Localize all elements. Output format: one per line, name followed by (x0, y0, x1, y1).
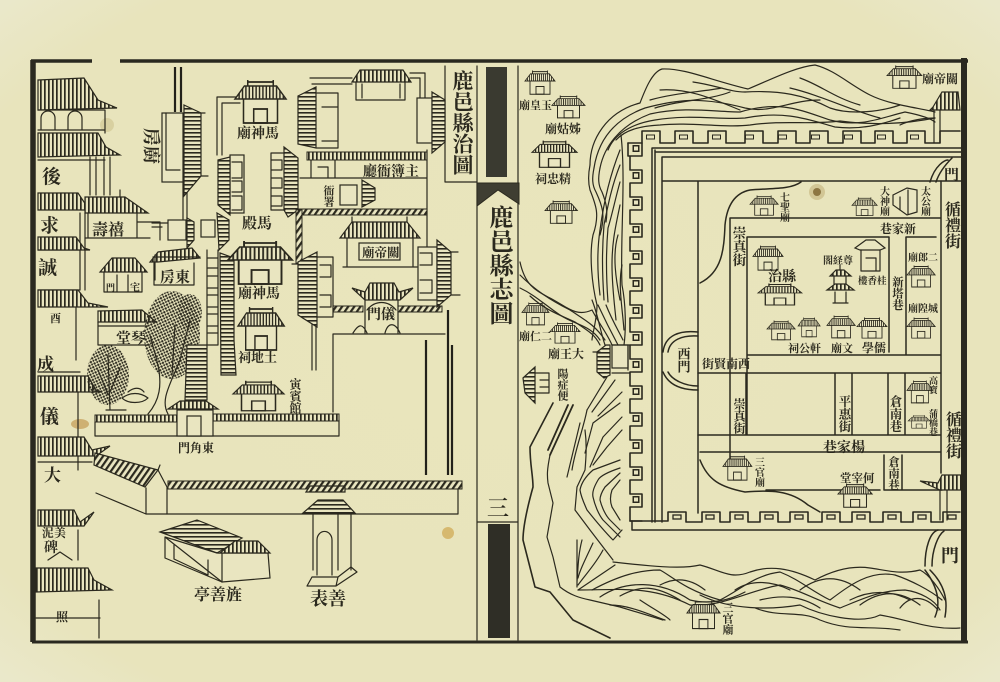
building row: 學儒 (861, 340, 886, 355)
mound (122, 388, 148, 402)
inner city walls and streets (632, 148, 962, 617)
building: east wing (150, 248, 200, 286)
county office (758, 268, 802, 305)
temple: gao (907, 375, 938, 403)
tower roof 7 (38, 437, 110, 456)
south wall with east corner gate: 門角東 (178, 440, 214, 455)
side building: lower west (292, 252, 333, 327)
temple: gu (545, 96, 585, 136)
temple: pu qiao (908, 408, 938, 436)
temple: gu: 廟姑姊 (545, 121, 581, 136)
temple: gao: 高寶 (928, 375, 938, 395)
tree right (144, 291, 202, 414)
memorial tower (303, 486, 357, 609)
temple: da shen (852, 185, 890, 217)
ceremonial gate: 門儀 (367, 306, 395, 323)
pavilion (160, 520, 270, 604)
dark ink block bottom (488, 524, 510, 638)
label: cang nan lane: 倉南巷 (888, 394, 902, 432)
building: earth god shrine: 祠地土 (238, 350, 277, 365)
side temple: 陽症便 (556, 367, 568, 402)
temple: yu huang (519, 71, 555, 112)
temple: san guan south (687, 601, 734, 636)
temple: city god: 廟隍城 (908, 302, 938, 315)
temple: er lang (907, 251, 938, 287)
temple: unnamed (545, 201, 577, 223)
building: residence gate: 宅 (130, 282, 140, 294)
top temple (310, 70, 425, 100)
folio number: 三 (487, 496, 509, 521)
temple: guandi NE: 廟帝關 (922, 71, 958, 86)
temple: pu qiao: 蒲橋巷 (928, 408, 938, 436)
tower roof 6 (38, 376, 102, 392)
south wall with east corner gate (95, 401, 339, 455)
guandi temple: 廟帝關 (362, 245, 400, 260)
river west band (588, 135, 625, 345)
temple: yu huang: 廟皇玉 (519, 98, 552, 112)
temple: san guan: 三官廟 (752, 457, 764, 488)
fish-tail ornament (477, 183, 519, 206)
temple: tai gong (893, 185, 930, 217)
building: residence gate: 門 (106, 283, 115, 293)
left palace towers: 照 (56, 610, 69, 624)
label: yang jia lane: 巷家楊 (823, 439, 865, 456)
tower roof 8 (38, 510, 94, 526)
city wall west crenels (628, 143, 642, 521)
tower: gui xiang: 樓香桂 (858, 275, 887, 287)
left palace towers: 求 (40, 215, 59, 237)
left palace towers: 大 (44, 466, 61, 485)
left palace towers: 酉 (50, 311, 61, 325)
building: qin hall (98, 310, 156, 347)
left palace towers: 成 (37, 355, 54, 374)
tree left (87, 345, 129, 410)
title left: 鹿邑縣治圖 (450, 69, 474, 175)
building: horse god temple upper: 廟神馬 (237, 125, 279, 142)
building: east wing: 房東 (160, 268, 190, 286)
building row: 祠公軒 (788, 341, 821, 355)
side building: hall west (218, 155, 244, 215)
river northwest feeder (520, 262, 612, 345)
inner city gates and towers (676, 66, 962, 636)
NE gate tower (930, 92, 960, 143)
side building: kitchen (162, 105, 208, 196)
label: chong zhen street south: 崇真街 (731, 397, 746, 435)
side building: small pair (168, 213, 229, 250)
left palace towers: 儀 (40, 406, 59, 428)
pagoda (827, 265, 854, 303)
left palace towers: 誠 (38, 257, 57, 279)
temple: er lang: 廟郎二 (908, 251, 938, 264)
building row: 廟文 (831, 341, 853, 355)
temple: he zai hall (838, 471, 875, 507)
river north band (590, 65, 935, 168)
label: xi nan xian street: 街賢南西 (702, 356, 750, 371)
left palace towers (36, 78, 120, 638)
left palace towers: 泥美 (42, 525, 66, 540)
label: west gate: 西門 (676, 346, 690, 374)
building: shou xi: 壽禧 (92, 220, 124, 239)
guandi temple (340, 217, 420, 267)
city wall north crenels (628, 131, 960, 143)
side building: top left (298, 87, 338, 148)
river south band (578, 562, 960, 630)
wall lines upper left yard (152, 67, 240, 280)
tower roof 3 (38, 193, 100, 210)
hatched courtyard wall (296, 209, 427, 263)
ceremonial gate (333, 283, 442, 333)
county office: 治縣 (768, 268, 797, 285)
tower: gui xiang (855, 240, 887, 287)
label: kitchen: 房廚 (141, 128, 161, 164)
temple: er ren: 廟仁二 (519, 329, 552, 343)
tower roof 9 (36, 568, 112, 592)
building: guest house (233, 377, 302, 415)
temple: city god (907, 302, 938, 338)
wall windows (673, 515, 956, 519)
side labels: 後 (42, 165, 62, 188)
building: horse god temple upper (235, 80, 286, 142)
label: xin jia lane: 巷家新 (880, 221, 916, 236)
shrine: jing zhong: 祠忠精 (535, 171, 571, 186)
side building: long gallery (185, 250, 236, 400)
west gate (593, 345, 630, 378)
label: cang nan lane south: 倉南巷 (887, 455, 900, 490)
left palace towers: 碑 (44, 540, 58, 556)
label: xin ta lane: 新塔巷 (891, 275, 904, 310)
pavilion: 亭善旌 (194, 585, 242, 604)
building: residence gate (100, 258, 147, 294)
side temple (523, 367, 568, 403)
central title column (445, 66, 519, 640)
middle office: 衙署 (322, 184, 334, 208)
long compound wall (167, 310, 462, 514)
building: horse god temple middle (228, 241, 292, 302)
building: earth god shrine (238, 307, 284, 365)
registrar hall: 廳衙簿主 (363, 163, 419, 180)
label: xun li street south: 循禮街 (944, 411, 962, 459)
stains (71, 118, 825, 539)
middle office (322, 180, 375, 208)
side building: middle west (271, 147, 298, 217)
temple: da wang (548, 322, 584, 361)
building row (767, 316, 887, 355)
building: horse god temple middle: 廟神馬 (238, 285, 280, 302)
building: shou xi (85, 190, 160, 240)
temple: san guan (723, 456, 764, 488)
right side outer temples (519, 71, 585, 403)
tower roof 2 (38, 133, 120, 157)
label: chong zhen street north: 崇真街 (730, 225, 746, 268)
registrar hall (300, 150, 427, 255)
side building: lower east (418, 240, 460, 307)
temple: san guan south: 三官廟 (721, 602, 734, 636)
tower roof 4 (38, 237, 90, 250)
memorial tower: 表善 (310, 589, 346, 609)
temple: da wang: 廟王大 (548, 346, 584, 361)
tower roof 1 (38, 78, 117, 110)
SE gate tower (920, 475, 962, 520)
temple: he zai hall: 堂宰何 (840, 471, 875, 485)
title centre: 鹿邑縣志圖 (485, 204, 513, 325)
tower roof 5 (38, 290, 108, 307)
oblique wall (94, 453, 167, 514)
temple: tai gong: 太公廟 (918, 185, 930, 217)
temple: qi sheng: 七聖廟 (778, 192, 790, 223)
temple: guandi NE (887, 66, 958, 88)
inner wall lines (312, 322, 445, 412)
river south west band (523, 377, 663, 638)
label: gate south: 門 (941, 546, 959, 566)
label: hall: 殿馬 (242, 215, 272, 232)
dark ink block top (486, 67, 507, 177)
building: qin hall: 堂琴 (116, 329, 146, 347)
label: ping hui street: 平惠街 (837, 394, 851, 433)
building: guest house: 寅賓館 (287, 377, 302, 415)
label: gate north: 門 (944, 167, 959, 184)
temple: da shen: 大神廟 (878, 185, 890, 217)
temple: unnamed north (753, 246, 783, 270)
shrine: jing zhong (532, 141, 577, 186)
city wall south crenels (630, 512, 960, 522)
temple: er ren (519, 303, 552, 343)
temple: qi sheng (750, 192, 790, 223)
side building: top right (417, 92, 445, 153)
label: xun li street north: 循禮街 (942, 201, 960, 249)
label: zun jing ge: 閣経尊 (823, 254, 853, 267)
